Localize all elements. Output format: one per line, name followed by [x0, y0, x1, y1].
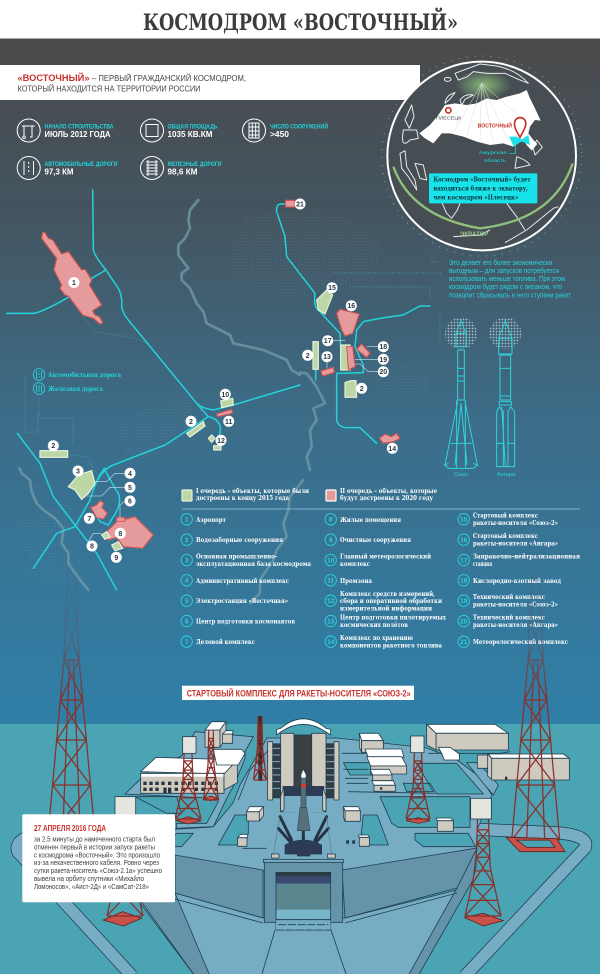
column 3: Технический комплекс — [473, 614, 545, 622]
column 1: Основная промышленно- — [196, 552, 277, 560]
small building — [247, 807, 263, 821]
column 3: ракеты-носителя «Ангара» — [473, 539, 558, 547]
right long building — [477, 754, 569, 780]
object 11 — [217, 409, 232, 417]
stat: number of structures — [242, 119, 328, 142]
plesetsk marker: ПЛЕСЕЦК — [436, 115, 462, 121]
side buildings — [268, 742, 273, 800]
column 2: 8 — [329, 517, 333, 524]
note box — [22, 814, 175, 902]
column 2: 13 — [327, 618, 335, 625]
map number labels: 9 — [114, 555, 118, 562]
main platform — [153, 738, 492, 871]
dark header band — [0, 38, 600, 64]
object 18 — [357, 344, 370, 357]
amur label: область — [484, 158, 506, 164]
far big building — [427, 724, 508, 750]
small tower 3 — [254, 717, 266, 780]
column 3: ракеты-носителя «Ангара» — [473, 621, 558, 629]
object 16 — [337, 309, 359, 336]
road right — [465, 829, 586, 974]
column 2: 10 — [327, 557, 335, 564]
road legend: Железная дорога — [48, 385, 104, 393]
column 2: 12 — [327, 598, 335, 605]
map objects — [40, 200, 400, 551]
object 2 tall — [313, 342, 318, 369]
object 13 — [321, 367, 334, 376]
object 3 base — [68, 471, 95, 499]
equator label: ЭКВАТОР — [460, 231, 488, 238]
column 1: Водозаборные сооружения — [196, 536, 283, 544]
text: КОСМОДРОМ «ВОСТОЧНЫЙ» — [143, 7, 458, 36]
object 2 lower — [345, 381, 357, 397]
small tower 2 — [204, 730, 218, 801]
map number labels: 2 — [306, 353, 310, 360]
note box: с космодрома «Восточный». Это произошло — [34, 851, 160, 859]
column 1: 6 — [185, 618, 189, 625]
road network east — [277, 204, 430, 443]
column 2: Очистные сооружения — [340, 536, 411, 544]
column 3: 20 — [460, 618, 468, 625]
column 3: 16 — [460, 537, 468, 544]
column 2: Промзона — [340, 577, 373, 585]
map number labels: 19 — [379, 357, 387, 364]
map number labels: 10 — [221, 392, 229, 399]
column 3: 15 — [460, 517, 468, 524]
rocket — [297, 769, 310, 831]
lower plaza — [140, 890, 457, 974]
object 17 — [341, 345, 350, 370]
column 1: Электростанция «Восточная» — [196, 597, 288, 605]
column 3: Стартовый комплекс — [473, 532, 538, 540]
rockets — [444, 317, 521, 478]
map number labels: 1 — [72, 280, 76, 287]
stat: total area — [140, 119, 218, 142]
object 9 treatment — [112, 542, 123, 551]
small building top — [222, 731, 233, 743]
vostochny marker — [478, 118, 526, 137]
note box: за 2,5 минуты до намеченного старта был — [34, 836, 155, 844]
small building lower — [238, 834, 248, 846]
road network west — [7, 190, 300, 490]
objects: east cluster — [187, 200, 400, 450]
column 1: 7 — [185, 639, 189, 646]
column 3: Технический комплекс — [473, 593, 545, 601]
column 1: 5 — [185, 598, 189, 605]
object 12 — [208, 435, 215, 442]
angara label: Ангара — [497, 472, 516, 478]
objects: south-west cluster — [40, 451, 153, 551]
map number labels: 5 — [128, 485, 132, 492]
amur region — [509, 135, 530, 146]
map number labels: 17 — [324, 338, 332, 345]
column 1: 3 — [185, 557, 189, 564]
intro text band: КОТОРЫЙ НАХОДИТСЯ НА ТЕРРИТОРИИ РОССИИ — [18, 84, 201, 94]
column 1: Административный комплекс — [196, 577, 289, 585]
amur label: Амурская — [479, 150, 507, 156]
patches — [342, 752, 510, 847]
map number labels: 2 — [51, 443, 55, 450]
angara rocket — [489, 317, 521, 478]
small tower 1 — [175, 737, 201, 824]
queue II legend — [326, 487, 437, 502]
left buildings — [141, 722, 263, 846]
queue II legend: будут достроены к 2020 году — [340, 494, 434, 502]
map number labels: 15 — [328, 285, 336, 292]
equator arc — [393, 163, 573, 228]
column 1: Центр подготовки космонавтов — [196, 618, 295, 626]
object 1: airport — [42, 233, 103, 324]
object 15 — [317, 290, 333, 314]
column 2: сбора и оперативной обработки — [340, 597, 442, 605]
rivers — [19, 200, 325, 603]
soyuz label: Союз — [454, 472, 468, 478]
pit — [263, 859, 343, 930]
column 1: эксплуатационная база космодрома — [196, 560, 312, 568]
column 1: 4 — [185, 578, 189, 585]
column 2: Комплекс по хранению — [340, 634, 413, 642]
note box: 27 АПРЕЛЯ 2016 ГОДА — [34, 824, 106, 833]
map number labels: 16 — [347, 303, 355, 310]
queue II legend: II очередь – объекты, которые — [340, 487, 437, 495]
launch complex scene — [0, 550, 600, 974]
continents outlines — [400, 64, 558, 243]
map number labels: 12 — [217, 438, 225, 445]
top tall building — [205, 722, 226, 747]
column 1: 1 — [185, 517, 189, 524]
amur label — [479, 142, 516, 164]
queue I legend — [182, 487, 309, 502]
object 8 green — [102, 532, 110, 539]
column 2: космических полётов — [340, 621, 408, 629]
map number labels: 2 — [189, 419, 193, 426]
soyuz rocket — [444, 317, 478, 478]
page background — [0, 39, 600, 739]
plesetsk marker — [436, 108, 462, 121]
column 2: 14 — [327, 639, 335, 646]
callout: Космодром «Восточный» будет — [433, 177, 531, 184]
column 3: ракеты-носителя «Союз-2» — [473, 600, 558, 608]
note box: отменен первый в истории запуск ракеты — [34, 844, 155, 852]
big tower right — [512, 550, 560, 840]
queue I legend: достроены к концу 2015 года — [196, 494, 290, 502]
leaders — [87, 473, 125, 542]
cluster buildings — [359, 733, 407, 791]
object 7 business — [91, 501, 107, 519]
map number labels: 13 — [323, 354, 331, 361]
column 2: Главный метеорологический — [340, 552, 431, 560]
map number labels: 6 — [128, 498, 132, 506]
big tower right base — [506, 837, 565, 852]
hangar body — [281, 733, 294, 812]
callout: чем космодром «Плесецк» — [433, 194, 519, 201]
ground — [0, 724, 600, 974]
column 3: Стартовый комплекс — [473, 512, 538, 520]
column 1: 2 — [185, 537, 189, 544]
rear building — [213, 749, 245, 765]
section heading banner — [182, 686, 414, 700]
stat: roads — [17, 156, 118, 180]
column 2 — [325, 514, 446, 650]
object 8 small — [117, 517, 125, 521]
globe caption: позволит сбрасывать в него ступени ракет — [449, 292, 572, 300]
russia — [419, 90, 541, 151]
column 2: Жилые помещения — [340, 516, 401, 524]
object 10 — [221, 398, 233, 408]
stat: roads: АВТОМОБИЛЬНЫЕ ДОРОГИ — [44, 161, 118, 168]
object 2 water intake — [40, 451, 68, 457]
callout: находиться ближе к экватору, — [433, 185, 528, 192]
big tower left — [49, 583, 94, 814]
map number labels: 8 — [118, 531, 122, 538]
column 2: измерительной информации — [340, 604, 432, 612]
column 3 — [458, 512, 580, 647]
stat: construction start: НАЧАЛО СТРОИТЕЛЬСТВА — [44, 124, 114, 130]
column 1: Аэропорт — [196, 516, 226, 524]
vostochny marker: ВОСТОЧНЫЙ — [478, 121, 512, 129]
title — [0, 0, 600, 38]
column 3: 18 — [460, 578, 468, 585]
small blocks — [343, 807, 360, 821]
column 3: Заправочно-нейтрализационная — [473, 552, 580, 560]
column 2: 11 — [327, 578, 335, 585]
road network south-west — [17, 433, 120, 590]
map number labels: 21 — [296, 202, 304, 208]
queue I legend: I очередь – объекты, которые были — [196, 487, 309, 495]
gantries — [273, 743, 281, 798]
main long building — [141, 757, 237, 793]
retaining walls — [175, 855, 263, 918]
left wing platform — [125, 732, 253, 828]
column 1 — [181, 514, 312, 647]
column 2: компонентов ракетного топлива — [340, 642, 443, 650]
column 3: 21 — [460, 639, 468, 646]
column 3: станция — [473, 560, 492, 568]
medium tower right — [464, 798, 503, 926]
map number labels: 8 — [90, 544, 94, 550]
intro text band: «ВОСТОЧНЫЙ» — [18, 72, 90, 84]
note box: Ломоносов», «Аист-2Д» и «СамСат-218» — [34, 884, 149, 891]
note box: сутки ракета-носитель «Союз-2.1а» успешно — [34, 868, 162, 875]
globe caption: космодром будет рядом с океаном, что — [449, 283, 562, 291]
stat: total area: ОБЩАЯ ПЛОЩАДЬ — [168, 124, 218, 130]
object 21 — [286, 200, 294, 207]
hangar roof — [277, 719, 331, 735]
stat: railways — [140, 156, 222, 180]
object 12 small — [214, 446, 221, 450]
map number labels: 4 — [128, 471, 132, 478]
map number labels: 7 — [87, 516, 91, 523]
map number labels: 11 — [225, 419, 233, 426]
slopes — [140, 893, 210, 974]
object legend and list — [181, 487, 580, 650]
service tower behind — [258, 716, 262, 781]
map number labels: 20 — [379, 369, 387, 376]
map number labels: 3 — [76, 468, 80, 476]
stat: construction start — [17, 119, 114, 142]
stat: total area: 1035 КВ.КМ — [168, 130, 213, 139]
medium tower left — [103, 797, 143, 926]
note box: из-за некачественного кабеля. Ровно через — [34, 859, 159, 867]
column 3: Кислородно-азотный завод — [473, 577, 561, 585]
callout — [429, 173, 537, 203]
column 3: ракеты-носителя «Союз-2» — [473, 519, 558, 527]
stat: roads: 97,3 КМ — [44, 168, 74, 176]
map number labels: 2 — [360, 386, 364, 393]
meridian rays — [453, 83, 523, 142]
note box: вывела на орбиту спутники «Михайло — [34, 875, 144, 883]
column 3: Метеорологический комплекс — [473, 638, 568, 646]
small tower 4 — [406, 736, 430, 823]
column 1: Деловой комплекс — [196, 638, 255, 646]
object 19 — [347, 347, 355, 370]
halftone terrain — [20, 210, 430, 590]
leaders — [327, 341, 378, 372]
stat: railways: ЖЕЛЕЗНЫЕ ДОРОГИ — [167, 161, 222, 168]
globe caption — [449, 259, 572, 300]
object 2 diagonal — [187, 422, 205, 437]
column 2: 9 — [329, 537, 333, 544]
road left — [17, 830, 132, 974]
column 2: Комплекс средств измерений, — [340, 590, 435, 598]
dots around globe — [382, 56, 582, 256]
stat: railways: 98,6 КМ — [168, 168, 198, 176]
object 8 housing — [105, 517, 153, 548]
launch pad arms — [273, 810, 332, 855]
road legend — [33, 369, 122, 394]
launch structure — [258, 716, 343, 930]
globe caption: Это делает его более экономически — [449, 259, 552, 267]
stat: number of structures: ЧИСЛО СООРУЖЕНИЙ — [270, 122, 328, 130]
roads — [7, 190, 430, 590]
stat: construction start: ИЮЛЬ 2012 ГОДА — [44, 130, 111, 139]
arctic glow — [455, 70, 512, 100]
column 2: Центр подготовки пилотируемых — [340, 614, 446, 622]
road legend: Автомобильная дорога — [48, 371, 122, 379]
globe caption: выгодным – для запусков потребуется — [449, 267, 559, 275]
right buildings — [343, 724, 569, 846]
map number labels: 14 — [388, 446, 396, 453]
map number labels — [48, 198, 398, 563]
stat: number of structures: >450 — [270, 130, 290, 139]
far small low — [438, 747, 459, 760]
column 3: 19 — [460, 598, 468, 605]
stats — [17, 119, 328, 180]
intro text band: – ПЕРВЫЙ ГРАЖДАНСКИЙ КОСМОДРОМ, — [92, 74, 246, 83]
launch base — [285, 840, 322, 856]
intro text band — [0, 65, 420, 100]
map number labels: 18 — [379, 344, 387, 351]
object 14 — [379, 433, 400, 443]
section heading banner: СТАРТОВЫЙ КОМПЛЕКС ДЛЯ РАКЕТЫ-НОСИТЕЛЯ «СОЮЗ-2» — [187, 687, 411, 699]
dotted connectors — [25, 252, 465, 445]
globe — [382, 56, 582, 256]
globe caption: использовать меньше топлива. При этом — [449, 276, 565, 283]
column 3: 17 — [460, 557, 468, 564]
column 2: комплекс — [340, 560, 370, 568]
